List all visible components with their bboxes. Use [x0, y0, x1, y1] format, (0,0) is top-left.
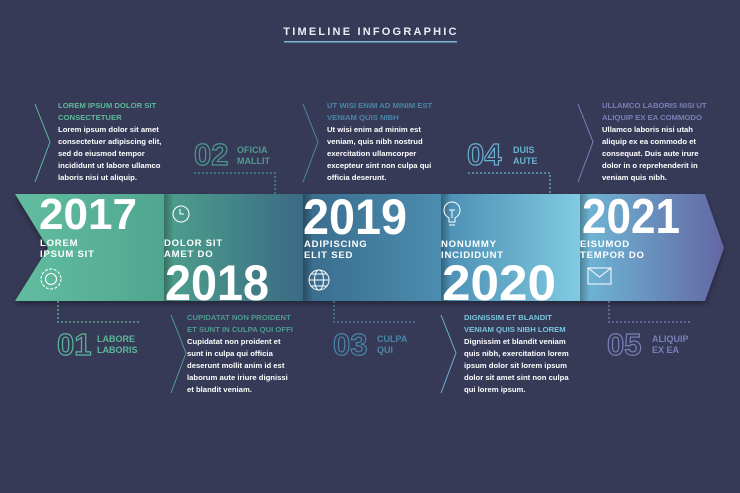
marker 02: 02 — [194, 137, 228, 172]
title: TIMELINE INFOGRAPHIC — [283, 26, 459, 38]
segment 2018: AMET DO — [164, 249, 213, 260]
segment 2017 — [15, 190, 166, 301]
marker 03: QUI — [377, 345, 393, 355]
text block 2: sunt in culpa qui officia — [187, 349, 274, 358]
text block 5: ALIQUIP EX EA COMMODO — [602, 113, 702, 122]
marker 01 — [57, 327, 138, 362]
text block 5: aliquip ex ea commodo et — [602, 137, 696, 146]
icon: envelope — [588, 268, 611, 284]
marker 03: CULPA — [377, 334, 408, 344]
text block 3: Ut wisi enim ad minim est — [327, 125, 421, 134]
text block 4 — [441, 313, 569, 394]
text block 4: VENIAM QUIS NIBH LOREM — [464, 325, 566, 334]
text block 3: exercitation ullamcorper — [327, 149, 416, 158]
marker 04: DUIS — [513, 145, 535, 155]
text block 3 — [303, 101, 433, 182]
marker 01: 01 — [57, 327, 91, 362]
text block 5: ULLAMCO LABORIS NISI UT — [602, 101, 707, 110]
text block 4: dolor sit amet sint non culpa — [464, 373, 569, 382]
segment 2021: TEMPOR DO — [580, 250, 645, 261]
marker 05: EX EA — [652, 345, 680, 355]
marker 03 — [333, 327, 408, 362]
segment 2017: LOREM — [40, 238, 78, 249]
text block 4: ipsum dolor sit lorem ipsum — [464, 361, 567, 370]
segment 2021: 2021 — [582, 190, 680, 244]
marker 03: 03 — [333, 327, 367, 362]
text block 5: Ullamco laboris nisi utah — [602, 125, 693, 134]
text block 2: ET SUNT IN CULPA QUI OFFI — [187, 325, 293, 334]
segment 2019: 2019 — [303, 189, 407, 245]
icon: bulb — [444, 202, 460, 225]
text block 2: deserunt mollit anim id est — [187, 361, 285, 370]
text block 1: consectetuer adipiscing elit, — [58, 137, 161, 146]
segment 2019 — [303, 189, 442, 301]
text block 2 — [171, 313, 293, 394]
segment 2018: DOLOR SIT — [164, 238, 223, 249]
text block 2: laborum aute iriure dignissi — [187, 373, 288, 382]
marker 02: OFICIA — [237, 145, 268, 155]
text block 4: qui lorem ipsum. — [464, 385, 526, 394]
icon: globe — [309, 270, 329, 290]
connectors — [58, 173, 691, 322]
segment 2017: 2017 — [39, 190, 137, 239]
marker 04 — [467, 137, 538, 172]
text block 3: officia deserunt. — [327, 173, 386, 182]
marker 05: 05 — [607, 327, 641, 362]
text block 4: Dignissim et blandit veniam — [464, 337, 566, 346]
band shadow — [15, 194, 724, 301]
text block 1: sed do eiusmod tempor — [58, 149, 145, 158]
marker 01: LABORIS — [97, 345, 138, 355]
marker 02: MALLIT — [237, 156, 270, 166]
segment 2021 — [580, 190, 724, 301]
text block 5 — [578, 101, 707, 182]
text block 1: laboris nisi ut aliquip. — [58, 173, 137, 182]
marker 05 — [607, 327, 689, 362]
text block 2: Cupidatat non proident et — [187, 337, 281, 346]
timeline band — [15, 189, 724, 311]
text block 3: veniam, quis nibh nostrud — [327, 137, 423, 146]
text block 1: LOREM IPSUM DOLOR SIT — [58, 101, 157, 110]
text block 1: CONSECTETUER — [58, 113, 122, 122]
segment 2020: INCIDIDUNT — [441, 250, 504, 261]
marker 02 — [194, 137, 270, 172]
icon: gear — [41, 269, 61, 289]
text block 3: excepteur sint non culpa qui — [327, 161, 431, 170]
text block 4: DIGNISSIM ET BLANDIT — [464, 313, 552, 322]
marker 01: LABORE — [97, 334, 135, 344]
marker 04: 04 — [467, 137, 502, 172]
text block 5: consequat. Duis aute irure — [602, 149, 699, 158]
text block 5: veniam quis nibh. — [602, 173, 667, 182]
text block 1: Lorem ipsum dolor sit amet — [58, 125, 159, 134]
text block 2: CUPIDATAT NON PROIDENT — [187, 313, 291, 322]
text block 5: dolor in o reprehenderit in — [602, 161, 698, 170]
segment 2018: 2018 — [165, 255, 269, 311]
icon: clock — [173, 206, 189, 222]
marker 05: ALIQUIP — [652, 334, 689, 344]
segment 2020: 2020 — [442, 255, 556, 311]
segment 2017: IPSUM SIT — [40, 249, 95, 260]
segment 2020: NONUMMY — [441, 239, 497, 250]
segment 2020 — [441, 194, 581, 311]
text block 2: et blandit veniam. — [187, 385, 252, 394]
text block 3: VENIAM QUIS NIBH — [327, 113, 399, 122]
marker 04: AUTE — [513, 156, 538, 166]
text block 3: UT WISI ENIM AD MINIM EST — [327, 101, 433, 110]
segment 2019: ADIPISCING — [304, 239, 367, 250]
text block 1 — [35, 101, 161, 182]
text block 1: incididunt ut labore ullamco — [58, 161, 161, 170]
segment 2019: ELIT SED — [304, 250, 353, 261]
segment 2018 — [164, 194, 304, 311]
segment 2021: EISUMOD — [580, 239, 630, 250]
text block 4: quis nibh, exercitation lorem — [464, 349, 569, 358]
